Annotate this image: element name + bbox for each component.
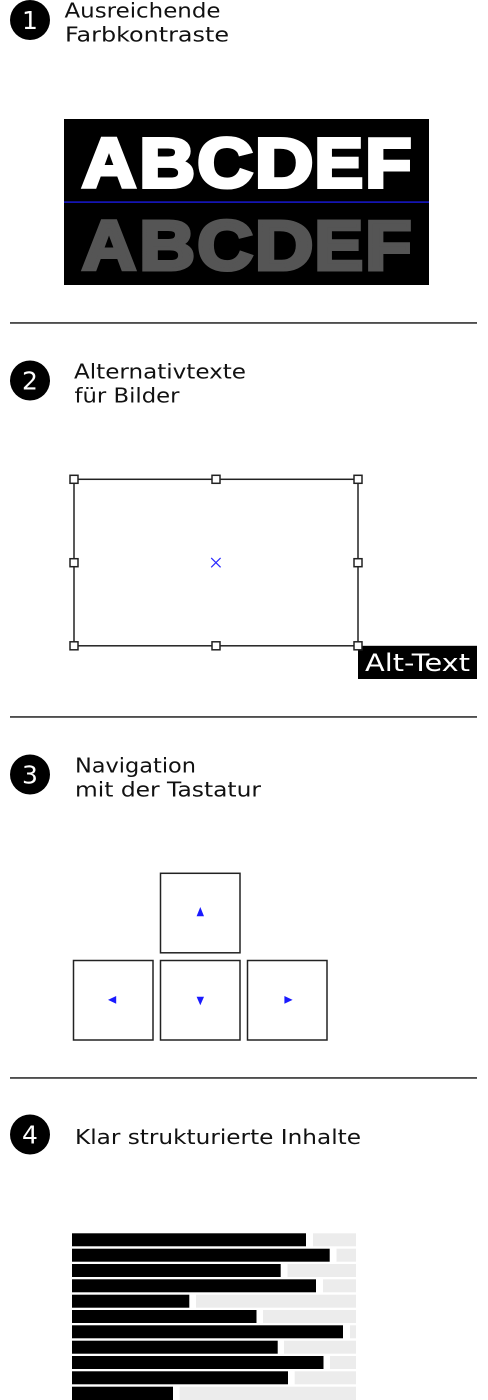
section 4: Struktur <box>10 1114 361 1400</box>
alt-text label: Alt-Text <box>365 649 470 677</box>
key: left <box>74 960 153 1040</box>
section 1: Farbkontraste <box>10 0 429 285</box>
low contrast letters <box>82 207 412 285</box>
key: up <box>160 873 240 953</box>
text block bars <box>72 1233 356 1400</box>
number badge 4: 4 <box>22 1120 38 1150</box>
high contrast letters: B <box>139 124 195 202</box>
heading 3 <box>75 753 262 802</box>
icon: blue center cross <box>211 558 221 567</box>
number badge 4 <box>10 1114 50 1154</box>
number badge 3: 3 <box>22 760 38 790</box>
low contrast letters: F <box>365 207 412 285</box>
high contrast letters: F <box>365 124 412 202</box>
heading 2: Alternativtexte <box>74 359 246 383</box>
number badge 1: 1 <box>22 6 38 35</box>
key: down <box>160 960 240 1040</box>
high contrast letters <box>82 124 412 202</box>
heading 3: mit der Tastatur <box>75 778 262 802</box>
number badge 2 <box>10 360 50 400</box>
heading 2 <box>74 359 246 407</box>
heading 1 <box>64 0 229 47</box>
heading 3: Navigation <box>75 753 196 777</box>
number badge 1 <box>10 0 50 40</box>
high contrast letters: A <box>82 124 136 202</box>
panel: contrast sample <box>64 119 429 285</box>
heading 4: Klar strukturierte Inhalte <box>75 1125 361 1149</box>
high contrast letters: C <box>197 124 253 202</box>
section 3: Tastatur <box>10 753 327 1040</box>
heading 2: für Bilder <box>74 383 180 407</box>
low contrast letters: B <box>139 207 195 285</box>
low contrast letters: D <box>255 207 313 285</box>
blue divider <box>64 201 429 203</box>
key: right <box>248 960 327 1040</box>
high contrast letters: E <box>314 124 363 202</box>
low contrast letters: A <box>82 207 136 285</box>
heading 1: Farbkontraste <box>65 23 229 47</box>
number badge 3 <box>10 754 50 794</box>
image placeholder frame <box>70 475 362 650</box>
low contrast letters: C <box>197 207 253 285</box>
alt-text label <box>354 642 477 679</box>
section 2: Alternativtexte <box>10 359 477 679</box>
high contrast letters: D <box>255 124 313 202</box>
low contrast letters: E <box>314 207 363 285</box>
number badge 2: 2 <box>22 366 38 396</box>
